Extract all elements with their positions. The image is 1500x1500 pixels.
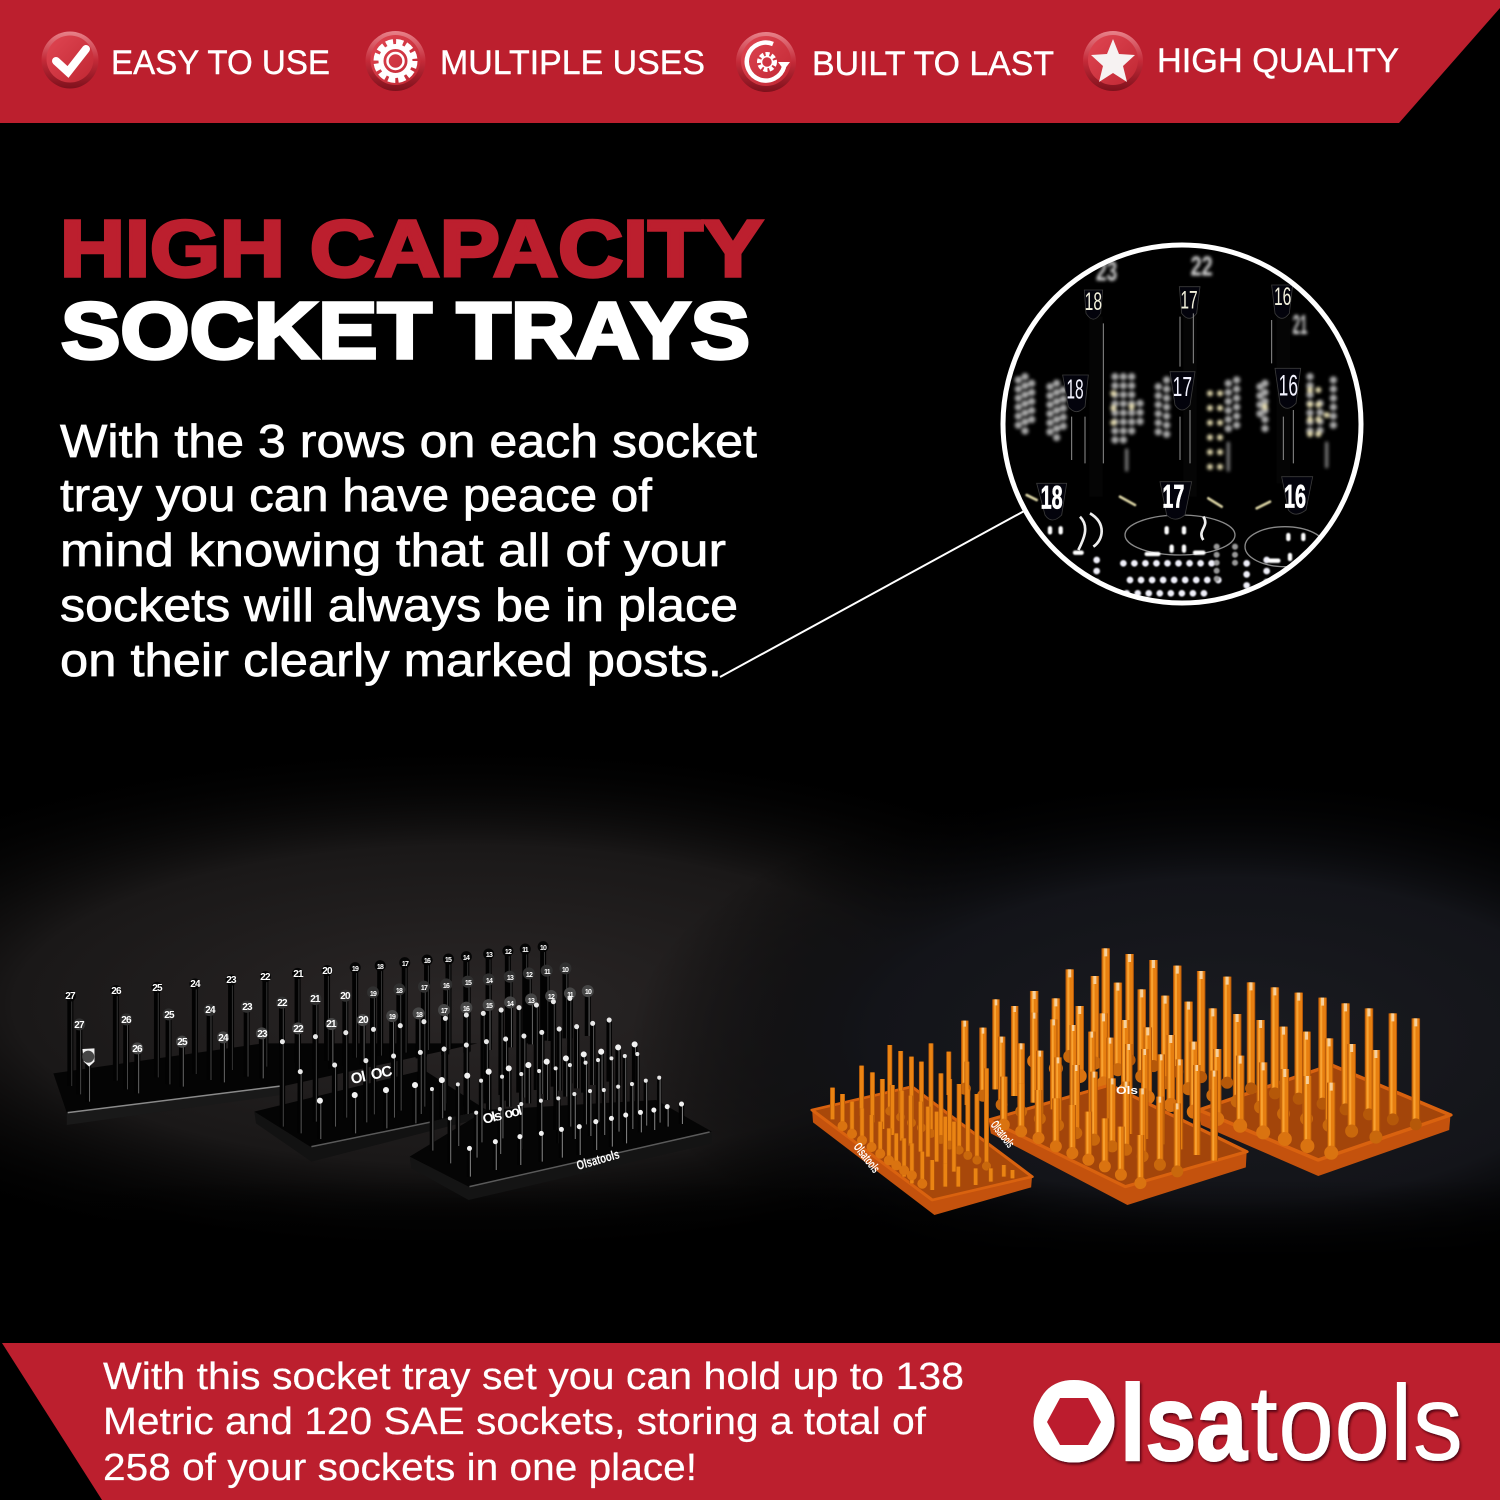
bottom text: Metric and 120 SAE sockets, storing a total of: [103, 1401, 926, 1443]
title: HIGH CAPACITY: [60, 204, 763, 293]
post numbers: 17: [1173, 371, 1192, 402]
black tray post numbers: 20: [340, 991, 351, 1002]
black tray post numbers: 14: [463, 955, 470, 962]
tray: black front: [410, 1054, 712, 1200]
black tray post numbers: 25: [177, 1037, 188, 1048]
black tray post numbers: 10: [540, 945, 547, 952]
body text: on their clearly marked posts.: [60, 634, 722, 686]
black tray post numbers: 11: [567, 992, 574, 999]
black tray post numbers: 18: [396, 988, 403, 995]
black tray post numbers: 27: [65, 991, 76, 1002]
title: [60, 204, 763, 375]
black tray post numbers: 22: [293, 1024, 304, 1035]
brand logo: [1033, 1359, 1463, 1484]
logos on black trays: Olsatools: [575, 1146, 621, 1173]
post numbers: 18: [1085, 289, 1102, 316]
tray: orange rear: [1033, 948, 1451, 1176]
post numbers: 17: [1180, 287, 1198, 314]
post numbers: 16: [1274, 284, 1291, 311]
black tray post numbers: 24: [205, 1005, 216, 1016]
icon: star badge: [1083, 31, 1143, 91]
black tray post numbers: [65, 945, 592, 1055]
body text: tray you can have peace of: [60, 469, 652, 521]
logos on orange trays: [851, 1085, 1138, 1176]
black tray post numbers: 21: [310, 994, 321, 1005]
black tray post numbers: 14: [507, 1001, 514, 1008]
black tray post numbers: 11: [522, 947, 529, 954]
title: SOCKET TRAYS: [61, 286, 750, 375]
black tray post numbers: 13: [528, 998, 535, 1005]
icon: check mark badge: [42, 32, 98, 88]
logos on black trays: Ol OC: [349, 1063, 394, 1088]
black tray post numbers: 17: [402, 961, 409, 968]
black tray post numbers: 15: [445, 957, 452, 964]
bottom text: With this socket tray set you can hold up to 138: [103, 1356, 964, 1398]
post numbers: [1041, 250, 1307, 515]
brand logo: O: [1033, 1359, 1115, 1484]
black tray post numbers: 13: [486, 952, 493, 959]
black tray post numbers: 12: [526, 972, 533, 979]
black tray post numbers: 18: [416, 1012, 423, 1019]
black tray post numbers: 19: [352, 966, 359, 973]
logos on orange trays: Ols: [1116, 1085, 1138, 1097]
body text: mind knowing that all of your: [60, 524, 726, 576]
logos on black trays: Ols ool: [481, 1102, 524, 1127]
orange socket trays: [812, 948, 1451, 1215]
post numbers: 18: [1041, 479, 1063, 515]
black tray post numbers: 16: [463, 1006, 470, 1013]
post numbers: 22: [1191, 250, 1213, 281]
black tray post numbers: 22: [277, 998, 288, 1009]
brand logo: tools: [1250, 1362, 1463, 1483]
post numbers: 18: [1066, 374, 1084, 405]
black tray post numbers: 21: [293, 969, 304, 980]
body text: [60, 415, 757, 686]
black tray post numbers: 16: [424, 958, 431, 965]
post numbers: 17: [1162, 478, 1184, 514]
black tray post numbers: 10: [585, 989, 592, 996]
black tray post numbers: 14: [486, 978, 493, 985]
tray: orange front: [812, 1043, 1032, 1215]
logos on black trays: [349, 1063, 621, 1173]
black tray post numbers: 20: [322, 966, 333, 977]
black tray post numbers: 25: [152, 983, 163, 994]
black tray post numbers: 27: [74, 1020, 85, 1031]
black tray post numbers: 26: [132, 1044, 143, 1055]
tray: orange middle: [964, 999, 1247, 1205]
logos on orange trays: Olsatools: [851, 1140, 883, 1176]
black tray post numbers: 23: [226, 975, 237, 986]
brand logo: lsa: [1120, 1362, 1248, 1483]
post numbers: 16: [1279, 370, 1298, 403]
black socket trays: [53, 947, 712, 1200]
magnified callout circle: [1003, 245, 1361, 603]
black tray post numbers: 19: [389, 1014, 396, 1021]
label: easy to use: EASY TO USE: [111, 44, 330, 82]
black tray post numbers: 23: [257, 1029, 268, 1040]
black tray post numbers: 18: [377, 964, 384, 971]
black tray post numbers: 12: [548, 994, 555, 1001]
posts and shields: [1096, 317, 1283, 497]
post numbers: 16: [1284, 478, 1306, 514]
body text: With the 3 rows on each socket: [60, 415, 757, 467]
bottom banner: [2, 1343, 1500, 1500]
tray: black rear: [53, 947, 589, 1125]
black tray post numbers: 24: [218, 1033, 229, 1044]
black tray post numbers: 12: [505, 949, 512, 956]
logos on orange trays: Olsatools: [988, 1118, 1018, 1150]
label: built to last: BUILT TO LAST: [812, 45, 1054, 83]
bottom socket rims: [1078, 513, 1325, 567]
black tray post numbers: 15: [465, 980, 472, 987]
bottom text: 258 of your sockets in one place!: [103, 1447, 697, 1489]
black tray post numbers: 23: [242, 1002, 253, 1013]
black tray post numbers: 15: [486, 1003, 493, 1010]
black tray post numbers: 26: [121, 1015, 132, 1026]
black tray post numbers: 17: [421, 985, 428, 992]
black tray post numbers: 22: [260, 972, 271, 983]
post numbers: 23: [1096, 256, 1117, 287]
magnified callout circle: 21: [1293, 309, 1307, 340]
black tray post numbers: 10: [562, 967, 569, 974]
top banner: [0, 0, 1500, 123]
callout line: [720, 510, 1026, 677]
black tray post numbers: 19: [370, 991, 377, 998]
black tray post numbers: 13: [507, 975, 514, 982]
black tray post numbers: 24: [190, 979, 201, 990]
blurred sockets: [1018, 377, 1333, 470]
black tray post numbers: 16: [443, 983, 450, 990]
black tray post numbers: 20: [358, 1015, 369, 1026]
black tray post numbers: 26: [111, 986, 122, 997]
body text: sockets will always be in place: [60, 579, 738, 631]
tray: black middle: [254, 998, 636, 1162]
label: high quality: HIGH QUALITY: [1157, 42, 1399, 80]
label: multiple uses: MULTIPLE USES: [440, 44, 705, 82]
black tray post numbers: 11: [544, 969, 551, 976]
black tray post numbers: 25: [164, 1010, 175, 1021]
black tray post numbers: 21: [326, 1019, 337, 1030]
icon: gear badge: [366, 31, 426, 91]
icon: circular arrow gear badge: [736, 32, 796, 92]
black tray post numbers: 17: [441, 1008, 448, 1015]
bottom text: [103, 1356, 964, 1489]
